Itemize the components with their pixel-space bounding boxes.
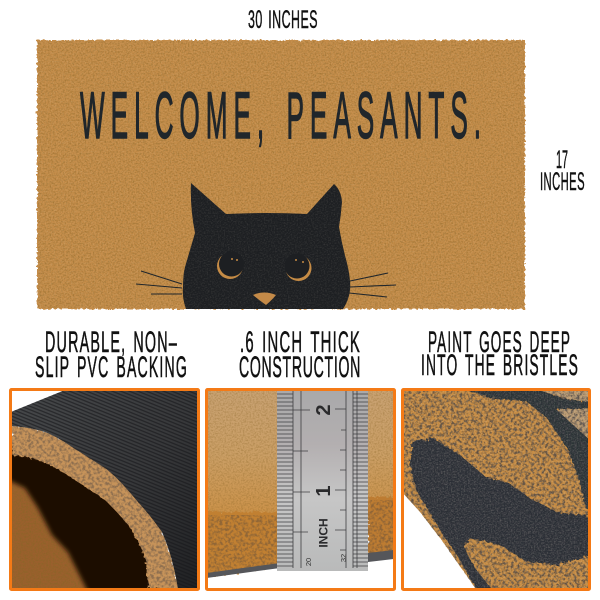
text: SLIP PVC BACKING [35, 351, 188, 384]
cat head [180, 180, 355, 310]
ruler number 2: 2 [313, 404, 335, 416]
heading: backing: DURABLE, NON– [45, 326, 178, 359]
cat illustration [136, 180, 396, 310]
main painted stripe [410, 438, 592, 592]
top right painted stripe [470, 391, 588, 510]
cat nose [253, 292, 276, 305]
panel: ruler thickness photo [200, 390, 400, 590]
tan patch [542, 391, 588, 438]
text: 30 INCHES [248, 6, 318, 34]
ruler small numbers: 20 [304, 558, 313, 566]
bristle edge [12, 426, 178, 589]
bristle front edge [208, 510, 277, 578]
right eye [284, 254, 312, 281]
steel ruler [277, 390, 368, 571]
white corner background [404, 494, 475, 588]
heading: backing [35, 326, 188, 384]
ruler number 1: 1 [313, 485, 335, 497]
dimension label: height: 17 [556, 146, 568, 174]
mat bottom shadow [207, 550, 394, 578]
panel: bristles close-up photo [400, 388, 592, 592]
steel ruler: 32 [339, 554, 348, 562]
inside of roll [11, 440, 161, 590]
bristle flecks [402, 390, 590, 589]
panel: rolled PVC backing photo [8, 390, 198, 592]
left eye [217, 252, 244, 279]
text: .6 INCH THICK [240, 326, 361, 359]
mat surface [207, 390, 394, 520]
dimension label: height [540, 146, 585, 196]
door mat [37, 40, 525, 310]
ruler label inch: INCH [316, 518, 330, 548]
heading: thickness [239, 326, 361, 384]
heading: paint [421, 326, 579, 382]
backing surface [11, 390, 198, 589]
cat whiskers [136, 271, 396, 297]
text: CONSTRUCTION [239, 351, 361, 384]
